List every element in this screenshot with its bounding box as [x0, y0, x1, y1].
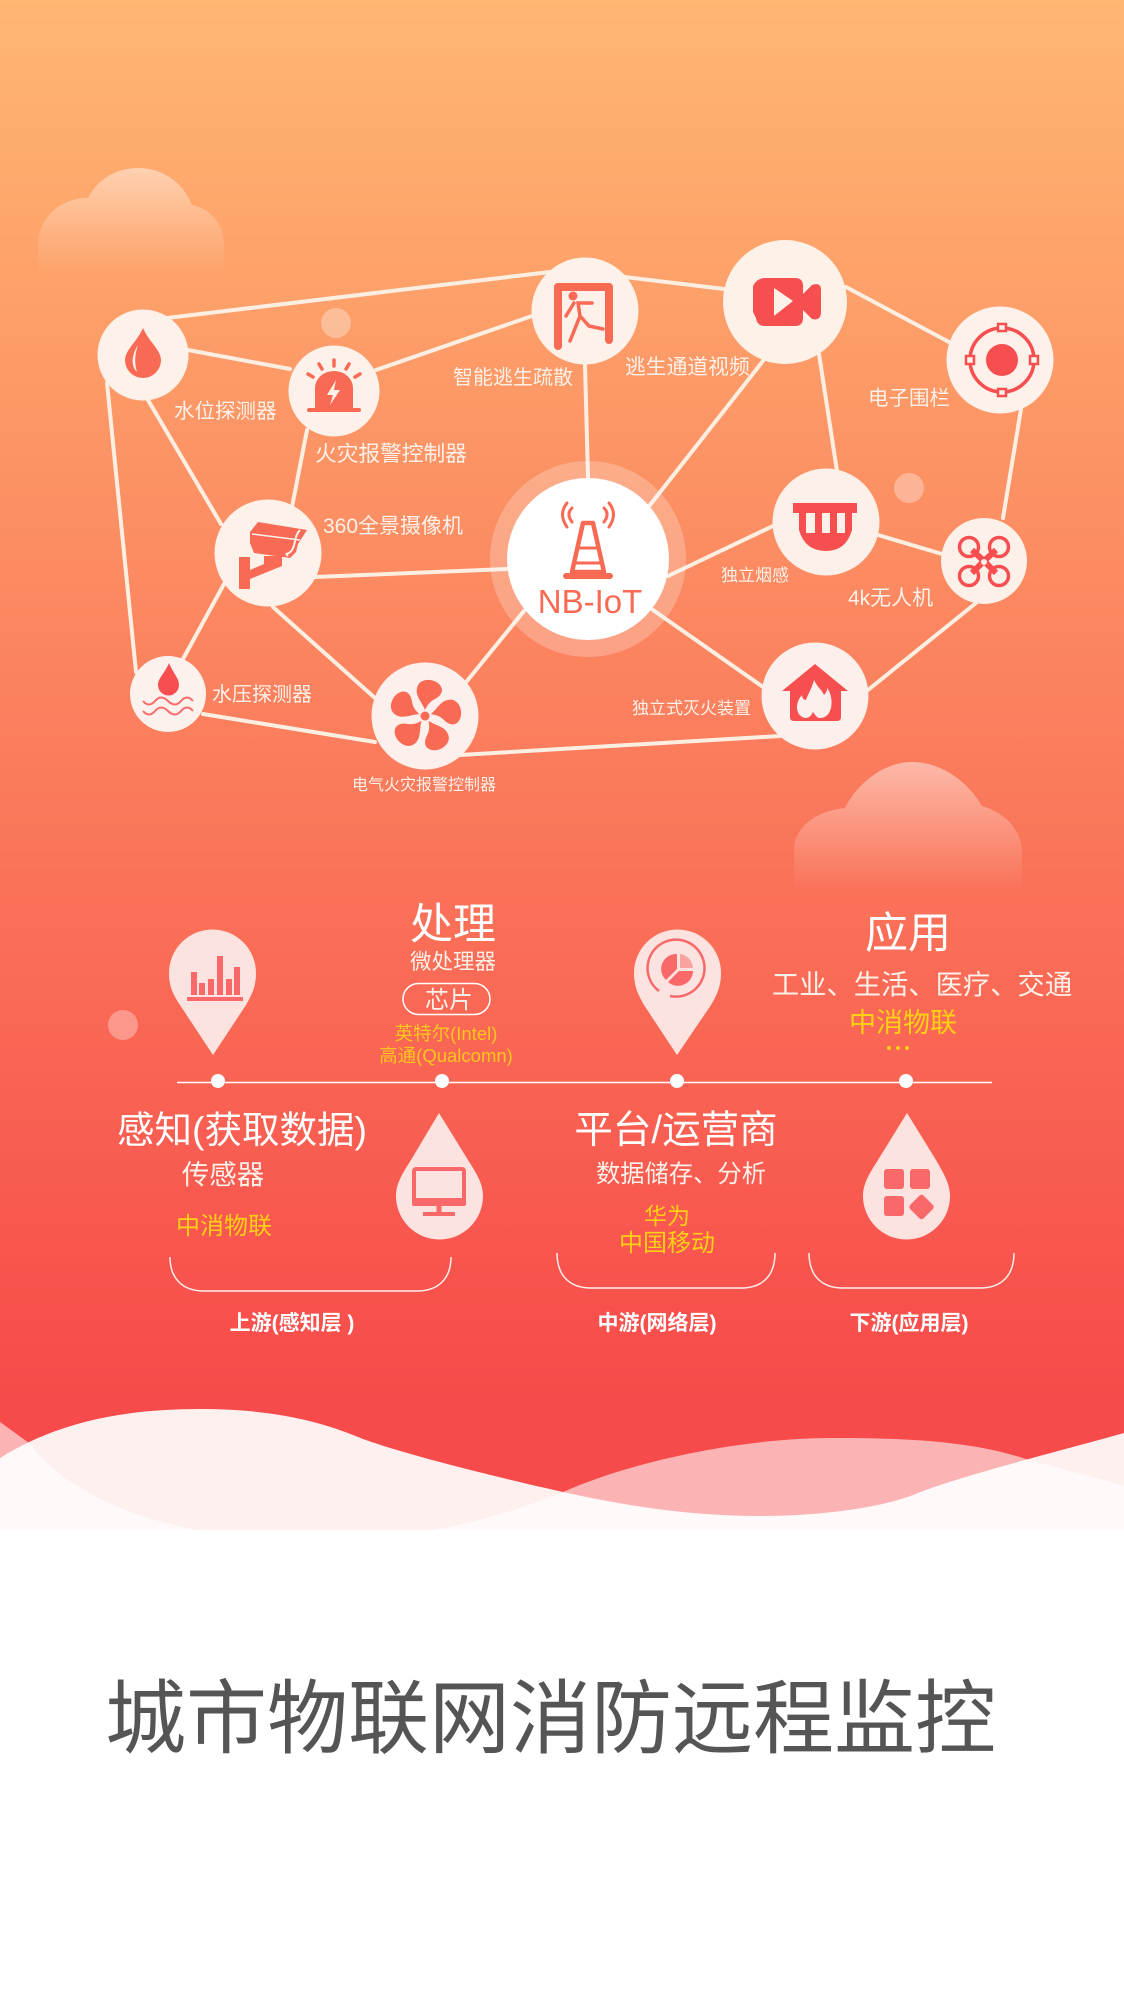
- node: fire alarm controller: [288, 346, 380, 436]
- node: NB-IoT hub: [490, 461, 686, 657]
- timeline: [177, 1074, 992, 1088]
- stage: processing: 英特尔(Intel): [395, 1023, 497, 1044]
- network labels: 4k无人机: [848, 587, 933, 610]
- stage: platform: [574, 1109, 778, 1257]
- node: standalone smoke detector: [772, 468, 880, 576]
- drop: monitor icon: [396, 1113, 483, 1240]
- network labels: 电子围栏: [868, 387, 950, 410]
- node: electrical fire alarm controller: [372, 662, 478, 770]
- bracket: downstream: 下游(应用层): [850, 1311, 968, 1335]
- network labels: 360全景摄像机: [323, 515, 463, 538]
- stage: sensing: [117, 1109, 367, 1240]
- pin: bar chart icon: [169, 930, 256, 1055]
- stage: processing: 高通(Qualcomn): [379, 1045, 513, 1066]
- node: smart escape exit: [532, 258, 638, 364]
- bracket: upstream: 上游(感知层 ): [230, 1311, 354, 1335]
- bracket: midstream: 中游(网络层): [598, 1311, 716, 1335]
- icon: signal tower: [562, 503, 614, 576]
- node: water pressure detector: [130, 656, 206, 732]
- bracket: downstream: [809, 1253, 1014, 1335]
- node: independent fire extinguisher: [762, 642, 868, 750]
- label: NB-IoT: NB-IoT: [538, 583, 642, 620]
- stage: application: 中消物联: [849, 1008, 957, 1038]
- stage: platform: 中国移动: [619, 1230, 715, 1257]
- network labels: 独立式灭火装置: [632, 699, 751, 718]
- pin: pie chart icon: [634, 930, 721, 1055]
- network labels: [174, 356, 950, 794]
- waves: [0, 1409, 1124, 1540]
- node: electronic fence: [946, 306, 1054, 414]
- stage: sensing: 传感器: [182, 1159, 264, 1190]
- network labels: 智能逃生疏散: [453, 366, 573, 389]
- network labels: 水位探测器: [174, 400, 276, 423]
- pill: chip: [403, 984, 490, 1014]
- cloud: top left: [38, 168, 224, 275]
- bracket: upstream: [170, 1257, 451, 1335]
- stage: sensing: 中消物联: [176, 1213, 272, 1240]
- stage: platform: 华为: [644, 1203, 690, 1229]
- network labels: 水压探测器: [212, 683, 312, 706]
- node: 360 panoramic camera: [214, 500, 322, 606]
- stage: processing: [379, 901, 513, 1066]
- network labels: 独立烟感: [721, 566, 789, 585]
- decorative dots: [108, 308, 924, 1040]
- stage: sensing: 感知(获取数据): [117, 1109, 367, 1151]
- stage: platform: 平台/运营商: [574, 1109, 778, 1152]
- stage: processing: 处理: [410, 901, 496, 949]
- cloud: right: [794, 762, 1022, 890]
- node: water level detector: [98, 310, 188, 400]
- stage: platform: 数据储存、分析: [596, 1161, 766, 1188]
- stage: application: 工业、生活、医疗、交通: [772, 969, 1072, 1000]
- node: 4K drone: [941, 518, 1027, 604]
- pill: chip: 芯片: [425, 987, 473, 1014]
- title: 城市物联网消防远程监控: [105, 1654, 996, 1771]
- node: escape passage video: [723, 240, 847, 364]
- network labels: 火灾报警控制器: [315, 441, 467, 466]
- stage: processing: 微处理器: [410, 950, 496, 974]
- network labels: 电气火灾报警控制器: [352, 776, 496, 794]
- network labels: 逃生通道视频: [625, 356, 750, 379]
- stage: application: 应用: [865, 910, 951, 958]
- gradient background: [0, 0, 1124, 1530]
- bracket: midstream: [557, 1253, 775, 1335]
- network links: [107, 272, 1021, 755]
- drop: apps icon: [863, 1113, 950, 1240]
- stage: application: [772, 910, 1072, 1050]
